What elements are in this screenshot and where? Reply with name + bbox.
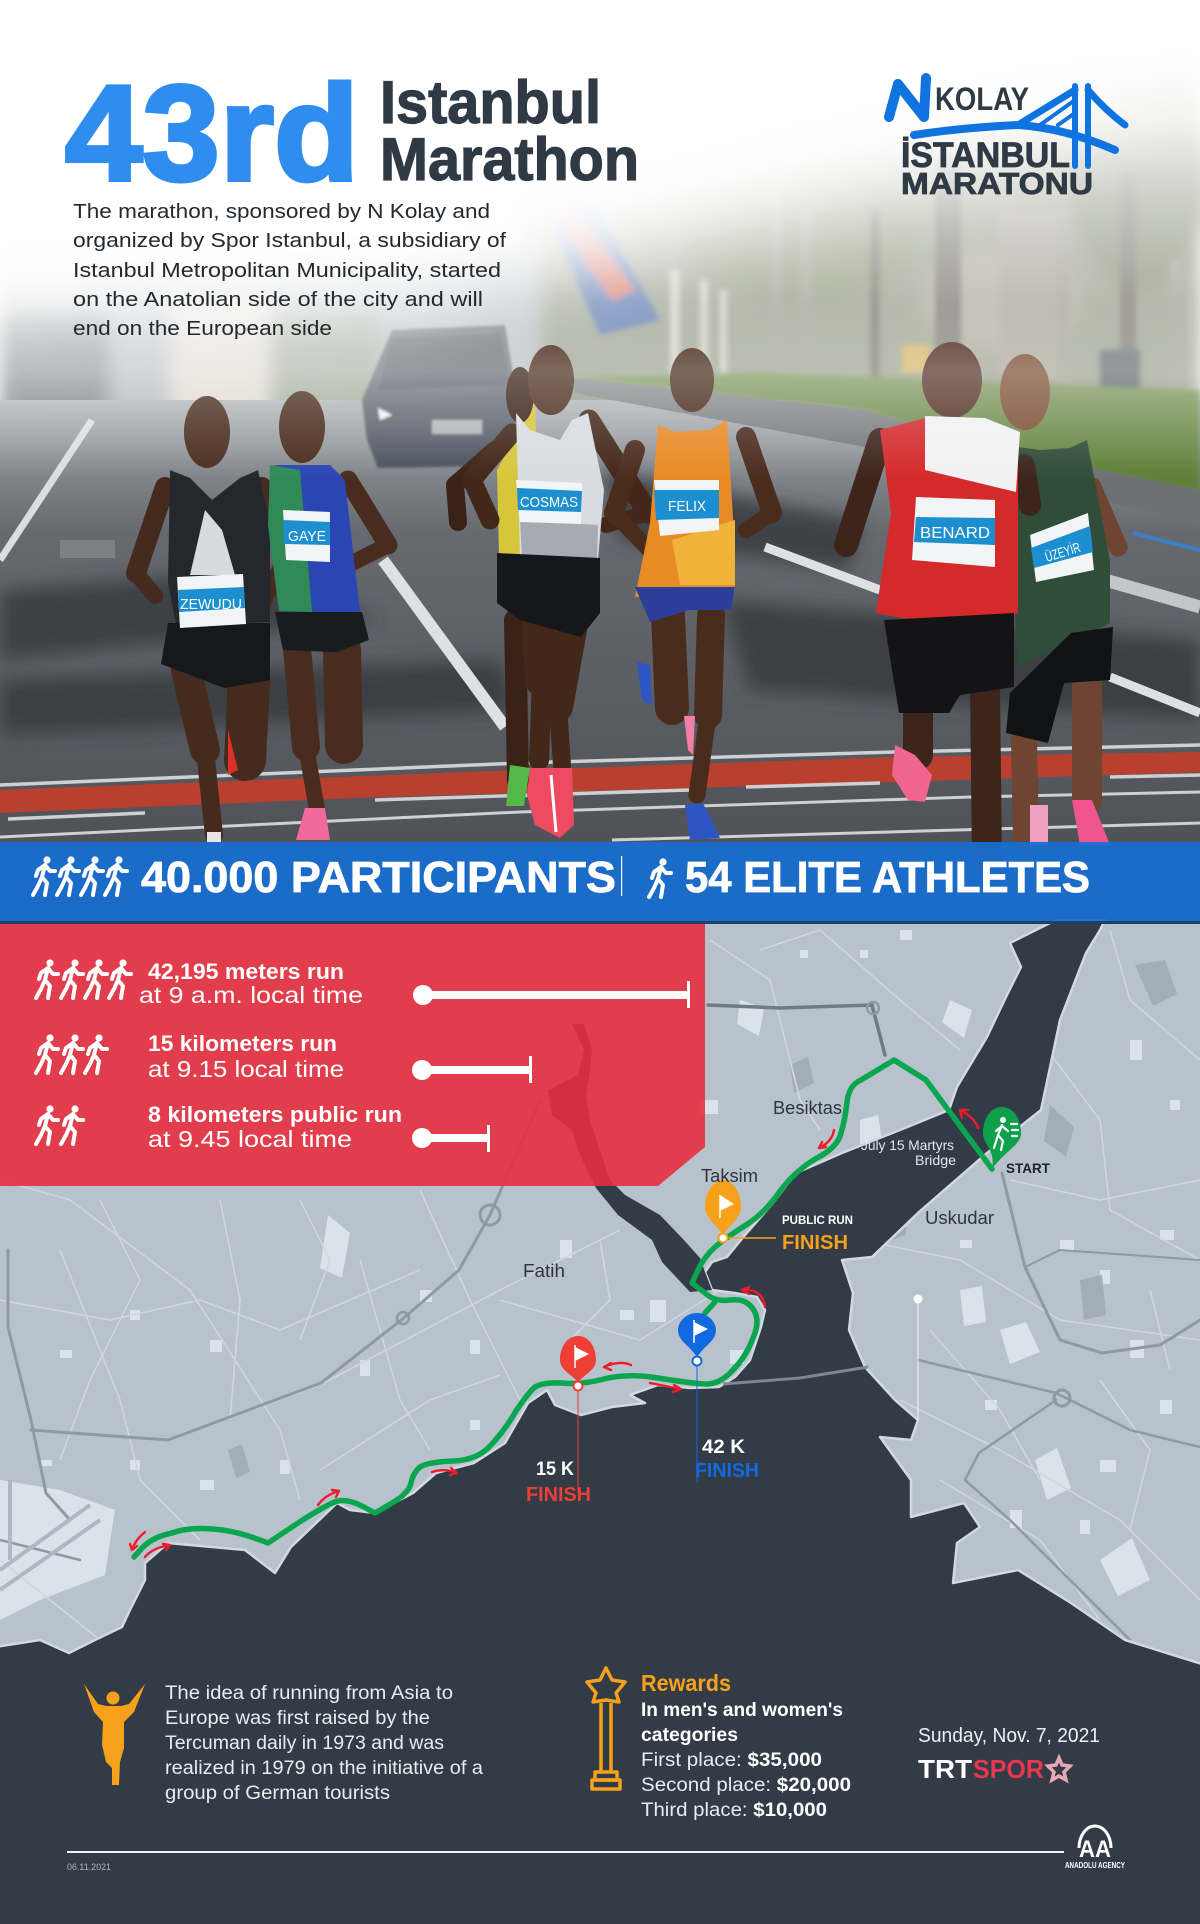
runner: Benard: BENARD xyxy=(920,525,990,542)
map: marathon route xyxy=(134,1060,992,1557)
soft haze over heads xyxy=(0,300,1200,480)
map: minor roads xyxy=(0,930,1200,1640)
row: 8 kilometers public run: at 9.45 local time xyxy=(148,1126,352,1152)
runners xyxy=(136,342,1118,860)
runner: Felix: FELIX xyxy=(668,498,706,515)
map labels: Besiktas xyxy=(773,1098,842,1118)
runner: Zewudu: ZEWUDU xyxy=(180,596,242,613)
map labels xyxy=(523,1098,1050,1506)
logo: N Kolay Istanbul Maratonu: KOLAY xyxy=(935,81,1029,117)
runner: Benard xyxy=(846,342,1030,860)
logo: N Kolay Istanbul Maratonu xyxy=(889,78,1125,201)
background car xyxy=(362,325,522,468)
text: idea of running from Asia to Europe xyxy=(165,1683,483,1804)
map labels: FINISH xyxy=(782,1232,848,1254)
row: 42,195 meters run: at 9 a.m. local time xyxy=(139,982,363,1008)
text: idea of running from Asia to Europe: realized in 1979 on the initiative of a xyxy=(165,1758,483,1779)
map: Golden Horn xyxy=(548,1024,712,1292)
map labels: PUBLIC RUN xyxy=(782,1213,853,1227)
map labels: 15 K xyxy=(536,1459,574,1480)
map xyxy=(0,920,1200,1924)
intro text: The marathon, sponsored by N Kolay and xyxy=(73,201,490,223)
text: idea of running from Asia to Europe: group of German tourists xyxy=(165,1783,390,1804)
intro text xyxy=(73,201,507,340)
pin: public run finish xyxy=(705,1180,776,1242)
haze layer xyxy=(0,0,1200,480)
lane lines xyxy=(0,420,1200,727)
map: darker land patches xyxy=(228,960,1177,1478)
text: rewards: Third place: $10,000 xyxy=(641,1800,827,1821)
text: idea of running from Asia to Europe: The idea of running from Asia to xyxy=(165,1683,453,1704)
row: 42,195 meters run: 42,195 meters run xyxy=(148,959,344,984)
logo: Anadolu Agency xyxy=(1065,1826,1126,1870)
red track band xyxy=(0,752,1200,813)
map labels: Bridge xyxy=(915,1152,956,1168)
row: 15 kilometers run xyxy=(36,1031,532,1083)
title: 43rd xyxy=(65,57,359,209)
footer date: 06.11.2021 xyxy=(67,1862,111,1872)
row: 15 kilometers run: at 9.15 local time xyxy=(148,1056,344,1082)
map labels: 42 K xyxy=(702,1437,745,1458)
runner: Felix xyxy=(614,348,772,840)
banner: participants xyxy=(0,842,1200,924)
map labels: July 15 Martyrs xyxy=(861,1137,954,1153)
runner: Zewudu xyxy=(136,396,288,842)
panel: race schedule xyxy=(0,923,705,1186)
text: rewards: Rewards xyxy=(641,1670,731,1696)
logo: Anadolu Agency: ANADOLU AGENCY xyxy=(1065,1861,1126,1870)
map: light land patches xyxy=(0,930,1180,1620)
map: water xyxy=(0,920,1200,1924)
road surface xyxy=(0,400,1200,842)
row: 42,195 meters run xyxy=(36,959,690,1008)
map: ferry line across strait xyxy=(723,1367,868,1384)
map: Uskudar marker xyxy=(914,1294,922,1420)
map: airport runways xyxy=(0,1480,100,1590)
text: idea of running from Asia to Europe: Europe was first raised by the xyxy=(165,1708,430,1729)
logo: N Kolay Istanbul Maratonu: MARATONU xyxy=(901,166,1093,201)
date: Sunday, Nov. 7, 2021 xyxy=(918,1725,1100,1747)
text: rewards: In men's and women's xyxy=(641,1700,843,1721)
white fade over top of photo xyxy=(0,0,1200,340)
intro text: end on the European side xyxy=(73,318,332,340)
logo: TRT Spor: TRT xyxy=(918,1754,972,1784)
map labels: FINISH xyxy=(526,1484,591,1506)
banner: participants: 54 ELITE ATHLETES xyxy=(685,853,1090,902)
row: 15 kilometers run: 15 kilometers run xyxy=(148,1031,337,1056)
title: Marathon xyxy=(380,126,639,193)
text: rewards: First place: $35,000 xyxy=(641,1750,822,1771)
runner: Gaye: GAYE xyxy=(288,528,326,545)
map labels: Taksim xyxy=(701,1166,758,1186)
title: Istanbul xyxy=(380,69,601,136)
intro text: organized by Spor Istanbul, a subsidiary of xyxy=(73,230,507,252)
logo: TRT Spor xyxy=(918,1754,1070,1784)
intro text: Istanbul Metropolitan Municipality, started xyxy=(73,260,501,282)
row: 8 kilometers public run: 8 kilometers public run xyxy=(148,1102,402,1127)
text: rewards: Second place: $20,000 xyxy=(641,1775,851,1796)
runner: Gaye xyxy=(268,391,388,840)
logo: N Kolay Istanbul Maratonu: İSTANBUL xyxy=(901,136,1070,175)
text: rewards xyxy=(641,1670,851,1821)
row: 8 kilometers public run xyxy=(36,1102,490,1152)
text: idea of running from Asia to Europe: Tercuman daily in 1973 and was xyxy=(165,1733,444,1754)
runner: Cosmas xyxy=(472,345,648,838)
map labels: Fatih xyxy=(523,1261,565,1281)
icon: victorious athlete xyxy=(84,1684,145,1785)
pin: 42K finish xyxy=(678,1313,716,1483)
runner: behind, yellow vest xyxy=(455,367,540,806)
logo: TRT Spor: SPOR xyxy=(973,1754,1044,1784)
pin: start xyxy=(983,1107,1021,1169)
intro text: on the Anatolian side of the city and will xyxy=(73,289,483,311)
banner: participants: 40.000 PARTICIPANTS xyxy=(141,853,616,902)
icon: trophy xyxy=(587,1668,625,1789)
map labels: FINISH xyxy=(695,1460,759,1482)
runner: Cosmas: COSMAS xyxy=(520,494,578,511)
map: highways xyxy=(0,1002,1200,1640)
photo: road and trees background xyxy=(0,0,1200,842)
runner: Uzeyir xyxy=(1000,354,1118,845)
logo: Anadolu Agency: AA xyxy=(1079,1836,1111,1863)
text: rewards: categories xyxy=(641,1725,738,1746)
footer rule xyxy=(67,1851,1064,1853)
map labels: START xyxy=(1006,1160,1050,1176)
runner: Uzeyir: ÜZEYİR xyxy=(1043,538,1082,565)
map: direction arrows xyxy=(130,1110,978,1557)
map labels: Uskudar xyxy=(925,1208,994,1228)
pin: 15K finish xyxy=(560,1336,596,1493)
title xyxy=(65,57,639,209)
